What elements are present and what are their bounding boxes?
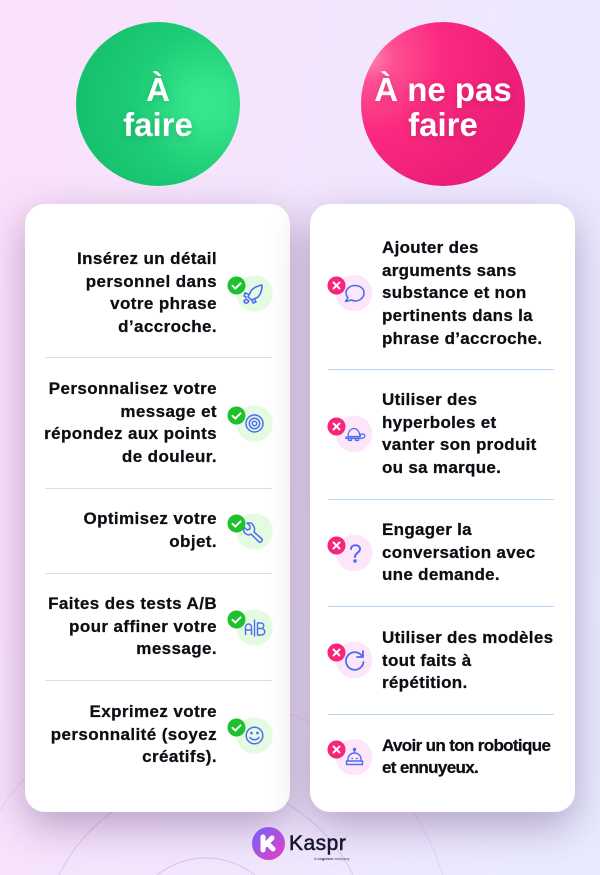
text: à ne pas faire 5: et ennuyeux.	[382, 758, 478, 777]
wordmark: Kaspr	[289, 832, 346, 855]
circle: à faire: faire	[123, 106, 193, 143]
circle: à ne pas faire	[361, 22, 525, 186]
text: à faire 2: répondez aux points	[44, 424, 217, 443]
text: à ne pas faire 1: Ajouter des	[382, 238, 479, 257]
text: à ne pas faire 5	[382, 736, 550, 777]
logo mark	[252, 827, 285, 860]
icon: target do	[228, 405, 273, 442]
text: à ne pas faire 1: phrase d’accroche.	[382, 329, 542, 348]
text: à ne pas faire 1: arguments sans	[382, 261, 517, 280]
text: à ne pas faire 1: pertinents dans la	[382, 306, 533, 325]
icon: speech bubble dont	[328, 274, 372, 312]
text: à faire 1: Insérez un détail	[77, 249, 217, 268]
text: à faire 1: votre phrase	[110, 294, 217, 313]
text: à faire 4	[48, 594, 217, 658]
text: à ne pas faire 4: tout faits à	[382, 651, 472, 670]
text: à faire 3: objet.	[169, 532, 217, 551]
circle: à faire: À	[146, 71, 170, 108]
tagline: A cognism company	[314, 857, 349, 861]
icon: rocket do	[228, 275, 273, 312]
text: à ne pas faire 2: ou sa marque.	[382, 458, 501, 477]
text: à faire 2: de douleur.	[122, 447, 217, 466]
text: à faire 5: créatifs).	[142, 747, 217, 766]
text: à ne pas faire 4	[382, 628, 553, 692]
icon: question mark dont	[328, 534, 372, 572]
circle: à ne pas faire: À ne pas	[374, 71, 512, 108]
icon: turtle dont	[328, 416, 372, 452]
text: à faire 1: d’accroche.	[118, 317, 217, 336]
logo: Kaspr	[252, 827, 350, 861]
text: à faire 1	[77, 249, 217, 336]
text: à ne pas faire 1: substance et non	[382, 283, 527, 302]
text: à ne pas faire 2: vanter son produit	[382, 435, 537, 454]
text: à ne pas faire 4: répétition.	[382, 673, 467, 692]
text: à ne pas faire 3	[382, 520, 535, 584]
text: à ne pas faire 3: Engager la	[382, 520, 472, 539]
circle: à faire	[76, 22, 240, 186]
text: à ne pas faire 4: Utiliser des modèles	[382, 628, 553, 647]
text: à faire 5: Exprimez votre	[90, 702, 217, 721]
text: à ne pas faire 3: une demande.	[382, 565, 500, 584]
icon: robot dont	[328, 738, 372, 776]
panel: à ne pas faire	[310, 204, 575, 812]
text: à faire 4: Faites des tests A/B	[48, 594, 217, 613]
text: à ne pas faire 3: conversation avec	[382, 543, 535, 562]
text: à faire 1: personnel dans	[86, 272, 217, 291]
text: à faire 5: personnalité (soyez	[51, 725, 217, 744]
text: à ne pas faire 2: Utiliser des	[382, 390, 477, 409]
circle: à ne pas faire: faire	[408, 106, 478, 143]
icon: A/B do	[228, 609, 273, 646]
text: à faire 3: Optimisez votre	[83, 509, 217, 528]
text: à faire 2	[44, 379, 217, 466]
text: à ne pas faire 5: Avoir un ton robotique	[382, 736, 550, 754]
icon: repeat arrow dont	[328, 642, 372, 678]
text: à ne pas faire 2	[382, 390, 537, 477]
text: à faire 4: pour affiner votre	[69, 617, 217, 636]
panel: à faire	[25, 204, 290, 812]
text: à faire 2: Personnalisez votre	[49, 379, 217, 398]
icon: wrench do	[228, 513, 273, 550]
text: à faire 2: message et	[120, 402, 217, 421]
text: à ne pas faire 2: hyperboles et	[382, 413, 496, 432]
icon: smile do	[228, 717, 273, 754]
text: à faire 3	[83, 509, 217, 551]
text: à faire 4: message.	[136, 639, 217, 658]
text: à ne pas faire 1	[382, 238, 542, 348]
text: à faire 5	[51, 702, 217, 766]
